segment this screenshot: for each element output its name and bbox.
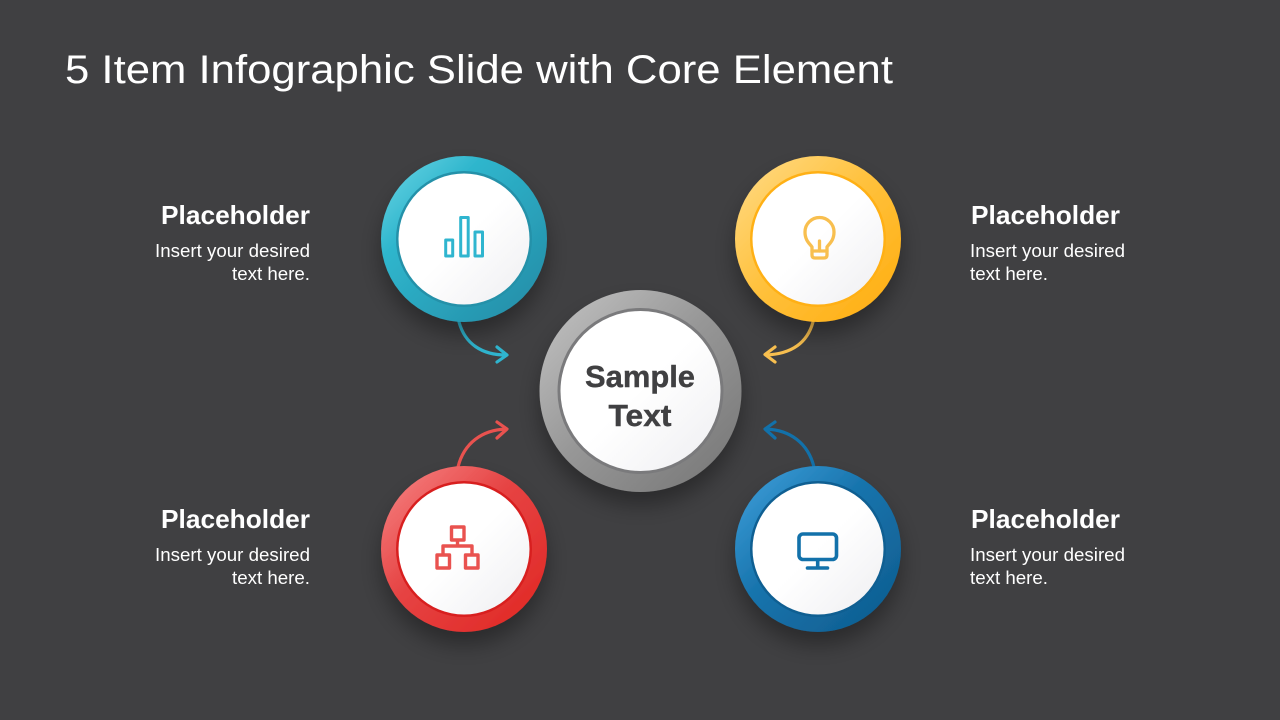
text block: top right: Placeholder (971, 200, 1120, 230)
text block: bottom right: Placeholder (971, 504, 1120, 534)
text block: bottom left: Insert your desired (155, 545, 310, 565)
icon: bar chart (446, 218, 482, 256)
arrow: blue item to core (765, 422, 814, 467)
core label: Sample (585, 359, 695, 394)
core circle (540, 290, 742, 492)
text block: top left: Insert your desired (155, 241, 310, 261)
icon: monitor (799, 534, 836, 568)
text block: bottom right: text here. (970, 568, 1048, 588)
title: 5 Item Infographic Slide with Core Element (65, 48, 893, 92)
arrow: red item to core (458, 422, 507, 467)
core label: Text (608, 398, 672, 433)
item: blue circle with monitor (735, 466, 901, 632)
item: red circle with hierarchy (381, 466, 547, 632)
text block: bottom right: Insert your desired (970, 545, 1125, 565)
text block: top right: text here. (970, 264, 1048, 284)
text block: bottom left: Placeholder (161, 504, 310, 534)
text block: top left (155, 200, 310, 284)
text block: bottom right (970, 504, 1125, 588)
text block: top right (970, 200, 1125, 284)
icon: light bulb (805, 218, 834, 258)
item: yellow circle with light bulb (735, 156, 901, 322)
text block: top right: Insert your desired (970, 241, 1125, 261)
arrow: yellow item to core (765, 322, 813, 362)
arrow: teal item to core (459, 322, 507, 362)
core label (585, 359, 695, 433)
item: teal circle with bar chart (381, 156, 547, 322)
text block: top left: text here. (232, 264, 310, 284)
text block: bottom left: text here. (232, 568, 310, 588)
text block: top left: Placeholder (161, 200, 310, 230)
text block: bottom left (155, 504, 310, 588)
icon: hierarchy (437, 527, 478, 568)
